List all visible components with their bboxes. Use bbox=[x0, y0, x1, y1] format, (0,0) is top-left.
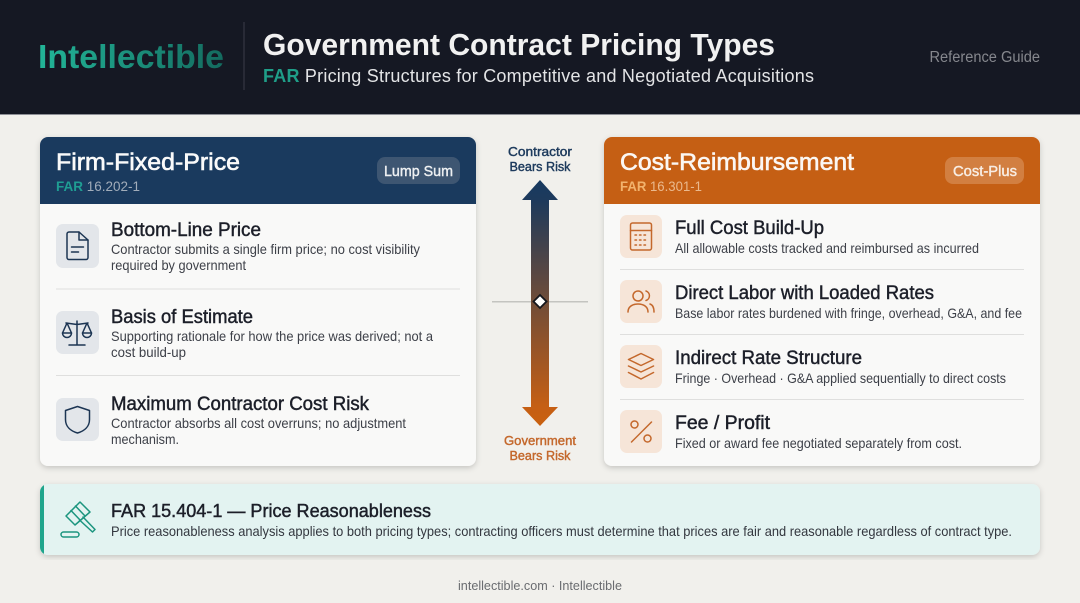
item: direct labor: Base labor rates burdened with fringe, overhead, G&A, and fee bbox=[675, 306, 1022, 321]
item: fee / profit: Fee / Profit bbox=[675, 413, 771, 434]
item: fee / profit bbox=[620, 410, 962, 453]
FAR reference: FAR 16.301-1 bbox=[620, 178, 702, 194]
heading: FAR 15.404-1: FAR 15.404-1 — Price Reasonableness bbox=[111, 501, 431, 521]
item: bottom-line price: Bottom-Line Price bbox=[111, 220, 261, 241]
item: indirect rate structure: Indirect Rate Structure bbox=[675, 348, 862, 369]
item: maximum contractor cost risk: Maximum Contractor Cost Risk bbox=[111, 394, 369, 415]
description: Price reasonableness analysis applies to both pricing types; contracting officers must determine that prices are fair and reasonable regardless of contract type. bbox=[111, 524, 1012, 539]
label: government bears risk: Government bbox=[504, 434, 577, 448]
item: basis of estimate bbox=[56, 307, 433, 360]
logo: Intellectible: Intellectible bbox=[38, 38, 224, 75]
item: maximum contractor cost risk: Contractor absorbs all cost overruns; no adjustment bbox=[111, 416, 406, 431]
panel: cost-reimbursement bbox=[604, 137, 1040, 466]
item: fee / profit: Fixed or award fee negotiated separately from cost. bbox=[675, 436, 962, 451]
icon: layers bbox=[628, 354, 654, 379]
title: Government Contract Pricing Types bbox=[263, 27, 775, 62]
marker: midpoint diamond bbox=[534, 295, 546, 308]
item: full cost build-up: Full Cost Build-Up bbox=[675, 218, 824, 239]
callout: price reasonableness bbox=[40, 484, 1040, 555]
heading: firm-fixed-price: Firm-Fixed-Price bbox=[56, 149, 240, 176]
icon: scales bbox=[62, 321, 92, 345]
risk axis: Bears Risk bbox=[510, 160, 571, 174]
item: direct labor bbox=[620, 280, 1022, 323]
item: maximum contractor cost risk bbox=[56, 394, 406, 447]
item: full cost build-up: All allowable costs tracked and reimbursed as incurred bbox=[675, 241, 979, 256]
badge: lump sum: Lump Sum bbox=[384, 164, 453, 180]
reference guide label: Reference Guide bbox=[930, 49, 1040, 66]
risk axis: Bears Risk bbox=[510, 449, 571, 463]
panel: firm-fixed-price bbox=[40, 137, 476, 466]
badge: cost-plus: Cost-Plus bbox=[953, 164, 1017, 180]
icon: shield bbox=[66, 406, 90, 433]
header band bbox=[0, 0, 1080, 115]
item: maximum contractor cost risk: mechanism. bbox=[111, 432, 179, 447]
item: full cost build-up bbox=[620, 215, 979, 258]
item: basis of estimate: cost build-up bbox=[111, 345, 186, 360]
item: indirect rate structure bbox=[620, 345, 1006, 388]
icon: people bbox=[628, 291, 654, 312]
icon: calculator bbox=[630, 223, 652, 250]
label: contractor bears risk: Contractor bbox=[508, 145, 572, 159]
icon: gavel bbox=[61, 502, 95, 537]
footer: intellectible.com · Intellectible bbox=[458, 579, 622, 593]
heading: cost-reimbursement: Cost-Reimbursement bbox=[620, 149, 854, 176]
item: indirect rate structure: Fringe · Overhead · G&A applied sequentially to direct costs bbox=[675, 371, 1006, 386]
item: direct labor: Direct Labor with Loaded Rates bbox=[675, 283, 934, 304]
icon: percent bbox=[631, 421, 652, 442]
item: basis of estimate: Supporting rationale for how the price was derived; not a bbox=[111, 329, 433, 344]
subtitle: FAR Pricing Structures for Competitive and Negotiated Acquisitions bbox=[263, 66, 814, 86]
item: bottom-line price: required by government bbox=[111, 258, 246, 273]
FAR reference: FAR 16.202-1 bbox=[56, 178, 140, 194]
item: bottom-line price bbox=[56, 220, 420, 273]
icon: document bbox=[67, 232, 88, 260]
badge: cost-plus bbox=[945, 157, 1024, 184]
item: basis of estimate: Basis of Estimate bbox=[111, 307, 253, 328]
arrow: two-headed risk gradient bbox=[522, 180, 558, 426]
item: bottom-line price: Contractor submits a single firm price; no cost visibility bbox=[111, 242, 420, 257]
badge: lump sum bbox=[377, 157, 460, 184]
risk axis bbox=[492, 145, 588, 463]
